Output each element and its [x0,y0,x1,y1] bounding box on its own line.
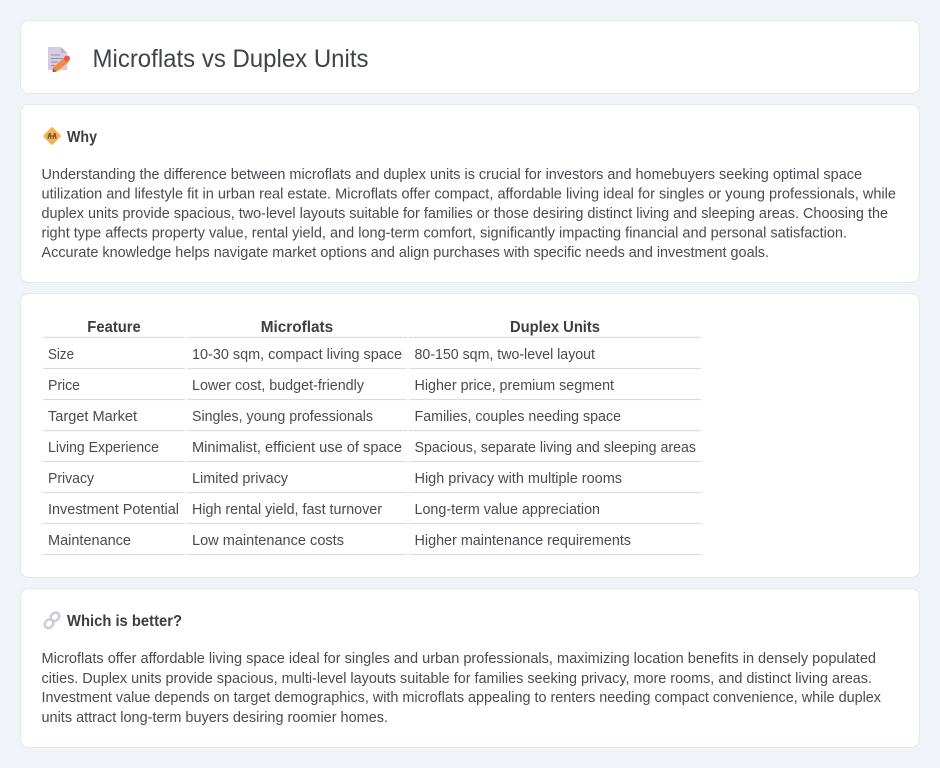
text block: why explanation: Accurate knowledge helps navigate market options and align purchases with specific needs and investment goals. [42,245,769,261]
table row: living experience [43,440,701,462]
text block: verdict: units attract long-term buyers desiring roomier homes. [42,710,388,726]
text block: why explanation: right type affects property value, rental yield, and long-term comfort, significantly impacting financial and personal satisfaction. [42,226,847,242]
table header row: Microflats [261,319,333,336]
table row: investment potential [43,502,701,524]
text block: why explanation: Understanding the difference between microflats and duplex units is crucial for investors and homebuyers seeking optimal space [42,167,862,183]
panel: comparison table [20,294,920,578]
table row: target market [43,409,701,430]
table row: price: Price [48,378,80,394]
table row: living experience: Spacious, separate living and sleeping areas [414,440,696,456]
heading: which is better: Which is better? [67,613,182,630]
table row: price: Lower cost, budget-friendly [192,378,365,394]
text block: verdict: cities. Duplex units provide spacious, multi-level layouts suitable for families seeking privacy, more rooms, and distinct living areas. [42,671,872,687]
icon: orange diamond sign [44,128,60,144]
title: Microflats vs Duplex Units [92,45,368,73]
table row: target market: Singles, young professionals [192,409,373,425]
table row: privacy [43,471,701,492]
table row: size: Size [48,347,74,363]
heading: why: Why [67,129,97,146]
table row: target market: Target Market [48,409,137,425]
table row: investment potential: Long-term value appreciation [414,502,600,518]
table row: investment potential: High rental yield, fast turnover [192,502,382,518]
table row: maintenance: Higher maintenance requirements [414,533,631,549]
table row: size: 10-30 sqm, compact living space [192,347,402,363]
table header row: Duplex Units [510,319,600,336]
table row: target market: Families, couples needing space [414,409,621,425]
panel: why [20,104,920,282]
icon: document with pencil [48,47,70,72]
text block: why explanation: duplex units provide spacious, two-level layouts suitable for families or those desiring distinct living and sleeping areas. Choosing the [42,206,888,222]
table row: maintenance [43,533,701,554]
table header row [43,319,701,338]
text block: why explanation [42,167,896,261]
text block: verdict [42,651,882,726]
panel: title header [20,20,920,94]
panel: which is better [20,588,920,748]
table row: investment potential: Investment Potential [48,502,179,518]
text block: verdict: Investment value depends on target demographics, with microflats appealing to renters needing compact convenience, while duplex [42,690,882,706]
icon: chain link [43,611,61,630]
table row: living experience: Living Experience [48,440,159,456]
table row: size [43,347,701,368]
text block: verdict: Microflats offer affordable living space ideal for singles and urban professionals, maximizing location benefits in densely populated [42,651,876,667]
table header row: Feature [87,319,141,336]
table row: maintenance: Low maintenance costs [192,533,344,549]
table row: privacy: Privacy [48,471,95,487]
table row: privacy: High privacy with multiple rooms [414,471,622,487]
table row: price: Higher price, premium segment [414,378,614,394]
table row: maintenance: Maintenance [48,533,131,549]
table row: price [43,378,701,400]
text block: why explanation: utilization and lifestyle fit in urban real estate. Microflats offer compact, affordable living ideal for singles or young professionals, while [42,186,896,202]
table row: privacy: Limited privacy [192,471,289,487]
table row: size: 80-150 sqm, two-level layout [414,347,595,363]
table row: living experience: Minimalist, efficient use of space [192,440,402,456]
